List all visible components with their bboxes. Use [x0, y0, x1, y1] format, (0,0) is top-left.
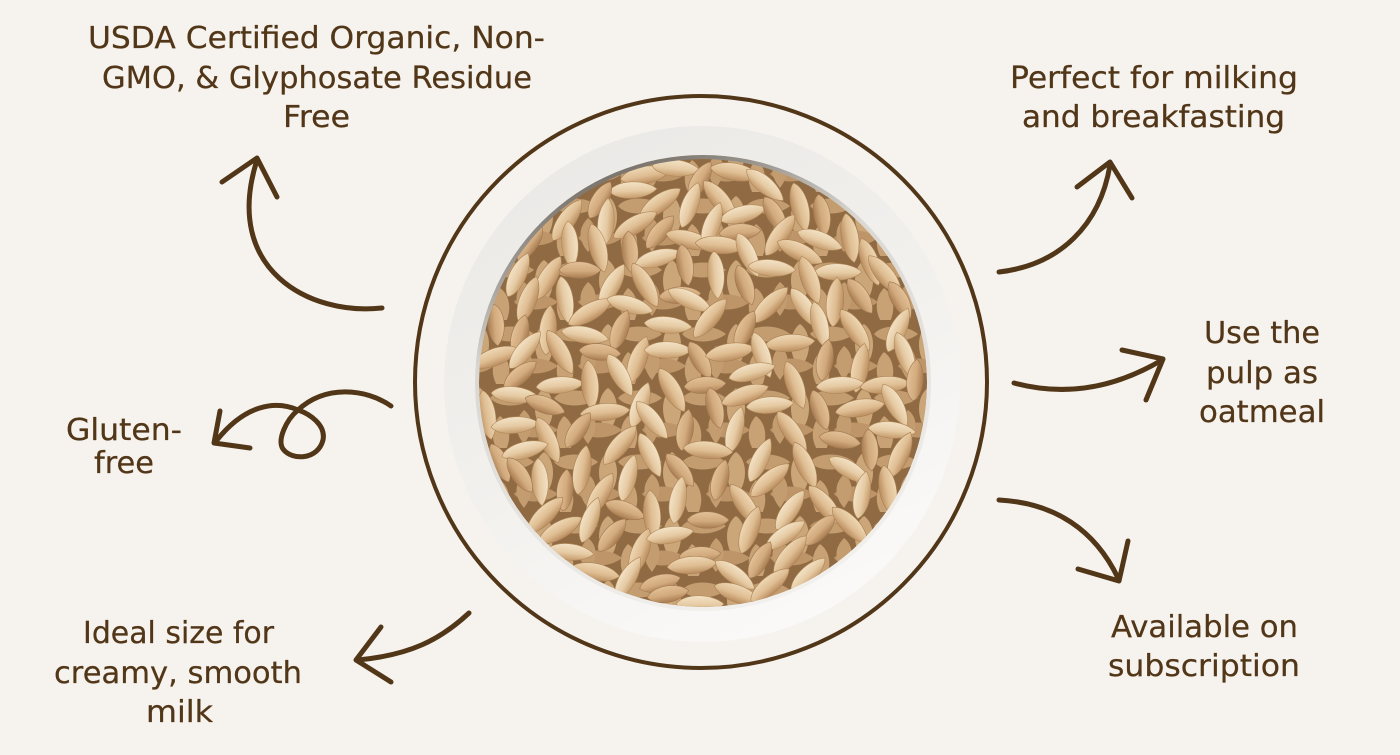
arrow: to milking: [999, 162, 1132, 272]
callout: milking and breakfasting: Perfect for milking: [1010, 61, 1298, 96]
callout: gluten-free: Gluten-: [66, 413, 182, 448]
arrow: to USDA organic: [222, 158, 382, 309]
callout: gluten-free: [66, 413, 182, 481]
callout: ideal size: milk: [146, 695, 214, 730]
callout: USDA organic: Free: [283, 100, 350, 135]
arrow: to pulp: [1014, 350, 1163, 400]
arrow: to ideal size: [356, 613, 469, 682]
callout: ideal size: [54, 616, 302, 730]
callout: USDA organic: GMO, & Glyphosate Residue: [102, 61, 532, 96]
callout: milking and breakfasting: and breakfasting: [1022, 100, 1285, 135]
callout: pulp as oatmeal: Use the: [1204, 316, 1320, 351]
bowl of oat grains: [444, 126, 960, 642]
bowl rim: [444, 126, 960, 642]
callout: milking and breakfasting: [1010, 61, 1298, 135]
callout: USDA organic: [88, 21, 545, 135]
callout: subscription: subscription: [1108, 649, 1300, 684]
callout: ideal size: creamy, smooth: [54, 656, 302, 691]
callout: pulp as oatmeal: oatmeal: [1199, 395, 1325, 430]
callout: pulp as oatmeal: [1199, 316, 1325, 430]
bowl inner wall: [475, 155, 931, 611]
callout: gluten-free: free: [94, 446, 154, 481]
callout: subscription: [1108, 610, 1300, 684]
callout: pulp as oatmeal: pulp as: [1206, 356, 1318, 391]
arrow: to subscription: [999, 500, 1128, 581]
callout: subscription: Available on: [1111, 610, 1298, 645]
oat grains: [469, 158, 927, 612]
circular ring outline: [415, 96, 987, 668]
callout: ideal size: Ideal size for: [83, 616, 275, 651]
callout: USDA organic: USDA Certified Organic, Non-: [88, 21, 545, 56]
arrow: looped to gluten-free: [214, 392, 391, 457]
